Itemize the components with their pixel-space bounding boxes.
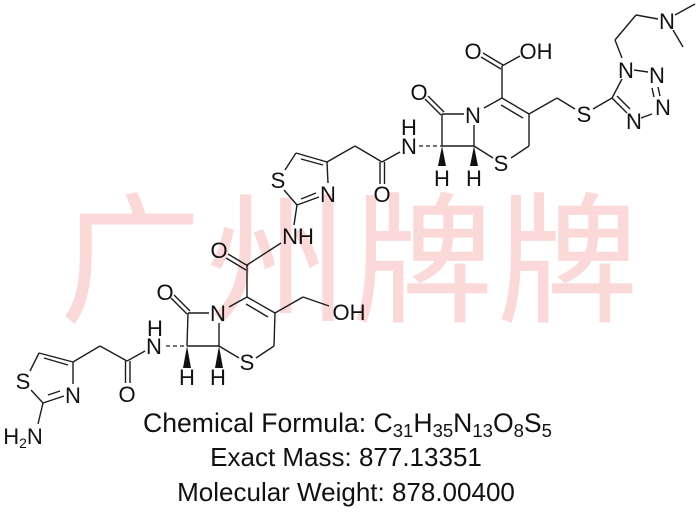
watermark: pink Chinese text: 牌 (352, 183, 493, 341)
chemical formula: 35 (433, 420, 453, 441)
chemical formula: Chemical Formula: C (143, 408, 393, 438)
atom labels: N (655, 95, 671, 120)
hashed bonds (166, 146, 442, 346)
atom labels: N (210, 301, 226, 326)
watermark: pink Chinese text: 州 (207, 183, 348, 341)
atom labels: N (401, 134, 417, 159)
caption: chemical data (143, 408, 552, 507)
stereo bonds (183, 146, 478, 368)
chemical formula: 5 (542, 420, 552, 441)
atom labels: H (210, 365, 226, 390)
atom labels: 2 (19, 435, 27, 451)
atom labels: S (494, 151, 508, 176)
atom labels: N (618, 58, 634, 83)
atom labels: S (577, 102, 591, 127)
atom labels: NH (282, 224, 314, 249)
chemical formula: 31 (393, 420, 413, 441)
atom labels: O (210, 238, 228, 263)
atom labels: H (3, 424, 19, 449)
bonds: upper-right cephem, carboxylic acid and tetrazole (425, 4, 695, 158)
atom labels: H (466, 166, 482, 191)
atom labels: S (271, 168, 285, 193)
atom labels: N (146, 334, 162, 359)
watermark: pink Chinese text (60, 183, 638, 341)
atom labels: O (373, 182, 391, 207)
atom labels: O (156, 280, 174, 305)
bonds: lower-left aminothiazole and cephem unit (30, 146, 400, 424)
atom labels: N (27, 424, 43, 449)
atom labels: N (65, 383, 81, 408)
atom labels: S (16, 369, 30, 394)
atom labels: N (320, 182, 336, 207)
chemical formula: N (453, 408, 472, 438)
watermark: pink Chinese text: 广 (60, 183, 201, 341)
atom labels: H (401, 115, 417, 140)
atom labels: O (118, 382, 136, 407)
atom labels: S (240, 350, 254, 375)
exact mass: Exact Mass: 877.13351 (210, 442, 482, 472)
atom labels: N (659, 9, 675, 34)
molecular weight: Molecular Weight: 878.00400 (177, 477, 515, 507)
atom labels: O (464, 39, 482, 64)
chemical formula: O (493, 408, 514, 438)
chemical formula: H (413, 408, 433, 438)
atom labels: H (434, 166, 450, 191)
atom labels: OH (332, 300, 366, 325)
chemical formula: 8 (514, 420, 524, 441)
atom labels: OH (520, 39, 552, 64)
watermark: pink Chinese text: 牌 (497, 183, 638, 341)
atom labels: N (465, 103, 481, 128)
atom labels: O (410, 80, 428, 105)
atom labels: H (147, 316, 163, 341)
atom labels: N (626, 109, 642, 134)
atom labels: N (649, 63, 665, 88)
chemical formula: S (524, 408, 542, 438)
chemical formula: 13 (472, 420, 493, 441)
atom labels: H (179, 365, 195, 390)
